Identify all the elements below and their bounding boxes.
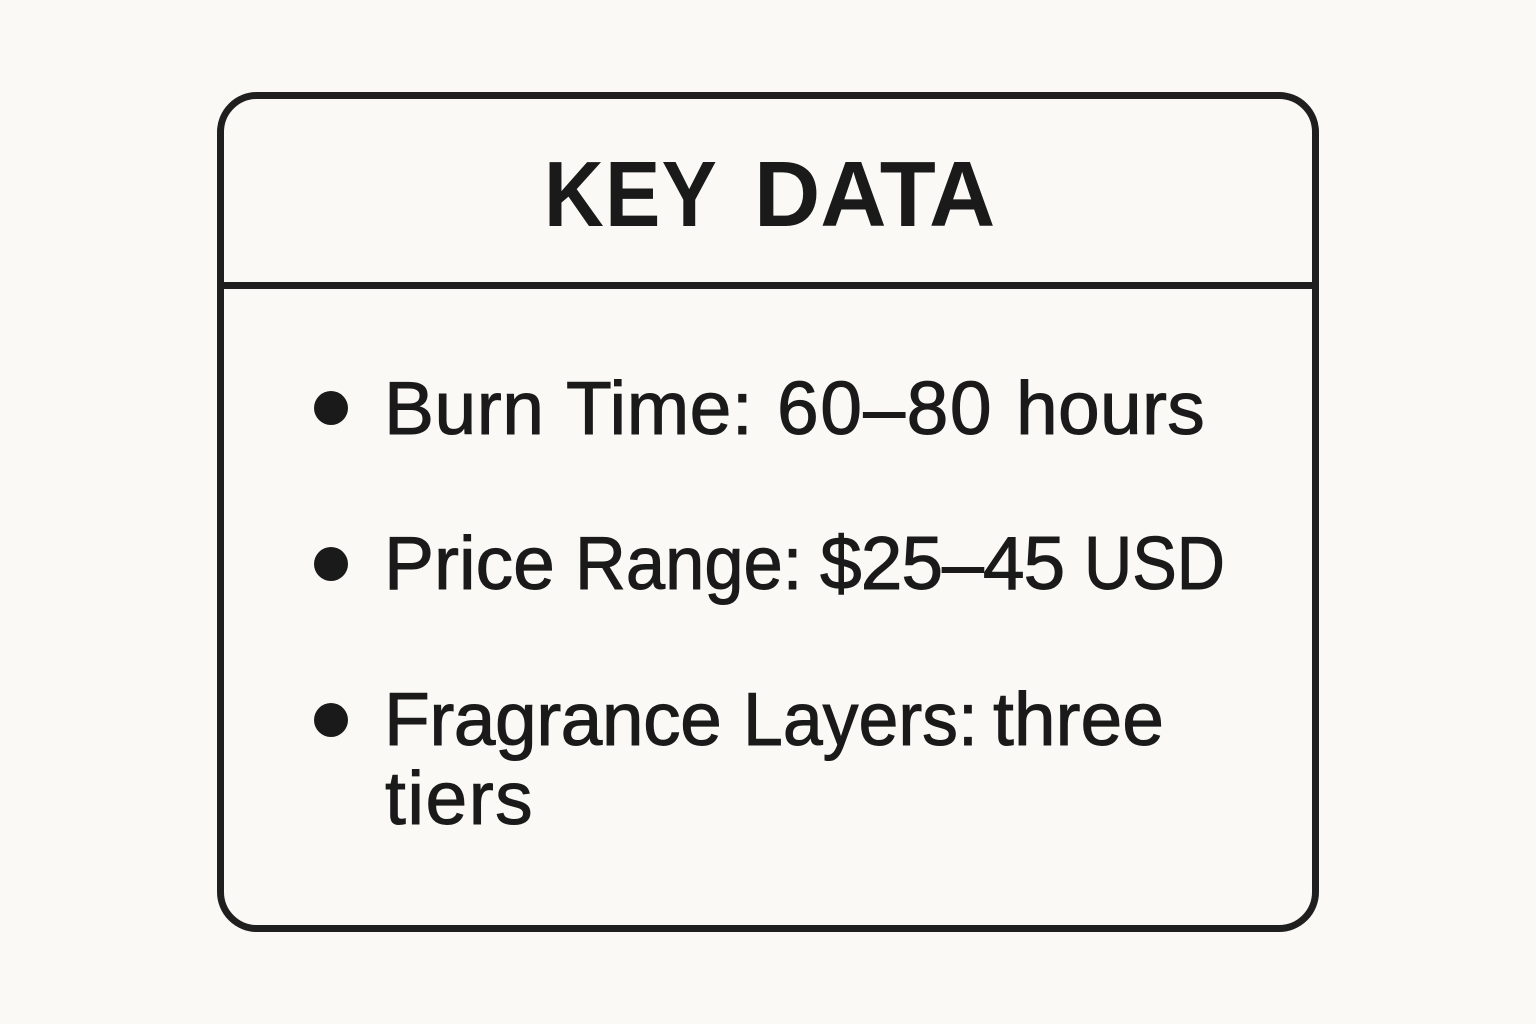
bullet icon: fragrance layers <box>314 703 348 737</box>
text: price range: Price <box>384 521 555 605</box>
text: burn time <box>384 366 1205 450</box>
header divider <box>220 282 1316 289</box>
text: burn time: Burn <box>384 366 544 450</box>
panel: key data card <box>217 92 1319 932</box>
text: price range <box>384 521 1225 605</box>
text: burn time: hours <box>1016 366 1205 450</box>
text: fragrance layers: Layers: <box>743 677 978 761</box>
bullet icon: burn time <box>314 391 348 425</box>
text: fragrance layers: tiers <box>385 756 534 840</box>
bullet icon: price range <box>314 547 348 581</box>
text: fragrance layers: Fragrance <box>384 677 721 761</box>
text: burn time: 60–80 <box>777 366 993 450</box>
heading: KEY DATA: DATA <box>754 142 995 246</box>
text: burn time: Time: <box>566 366 753 450</box>
text: price range: Range: <box>575 521 802 605</box>
text: price range: USD <box>1084 521 1225 605</box>
heading: KEY DATA <box>544 142 995 246</box>
text: fragrance layers <box>384 677 1164 840</box>
text: fragrance layers: three <box>993 677 1164 761</box>
text: price range: $25–45 <box>820 521 1064 605</box>
heading: KEY DATA: KEY <box>544 142 718 246</box>
